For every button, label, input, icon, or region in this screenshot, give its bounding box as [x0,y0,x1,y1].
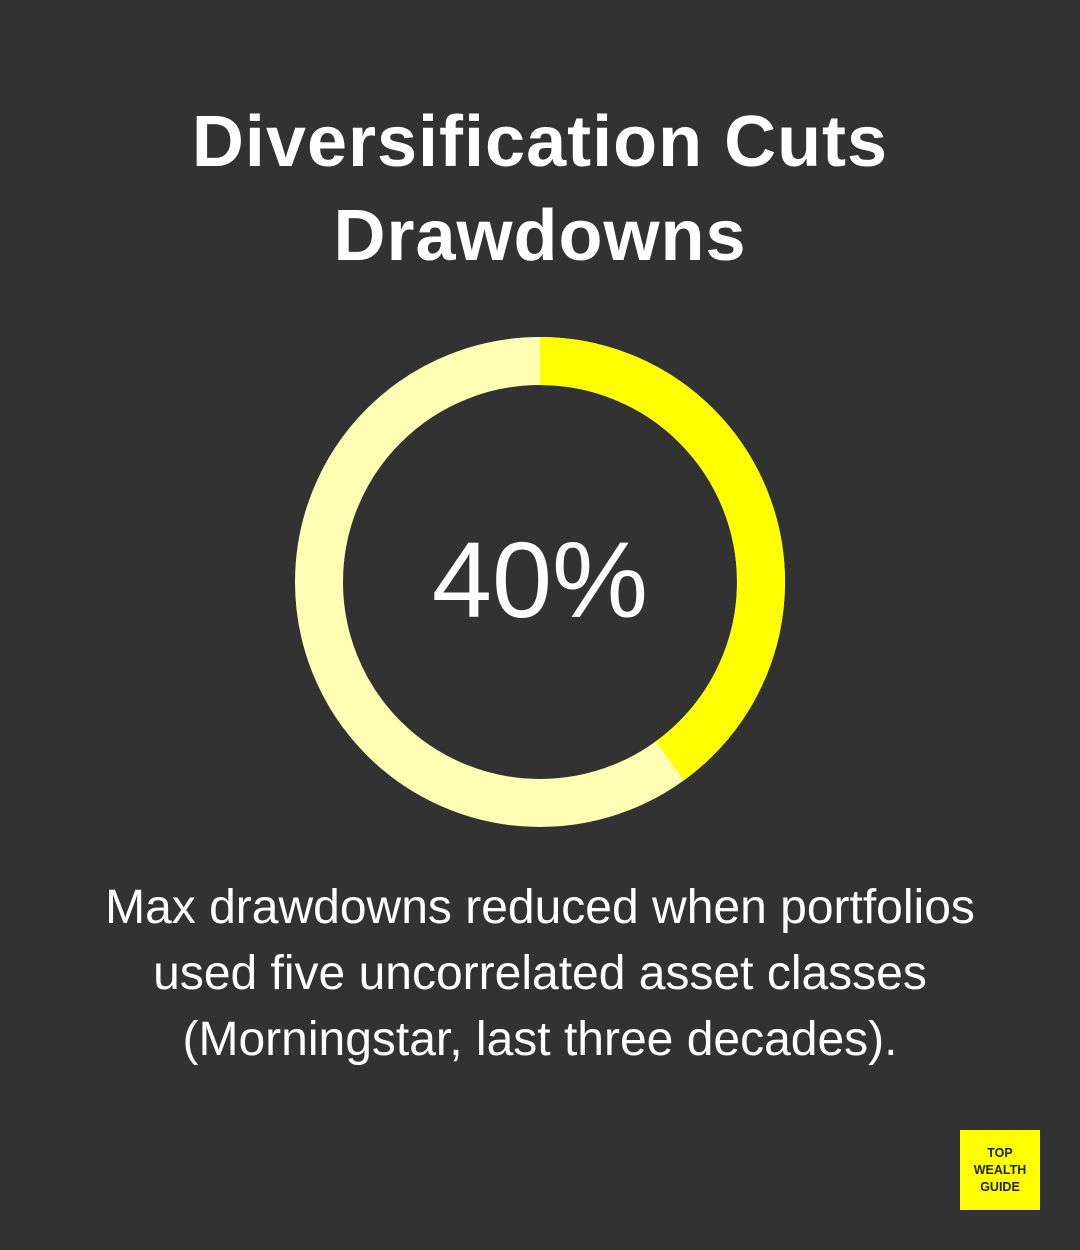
description: (Morningstar, last three decades). [182,1013,898,1066]
logo: WEALTH [974,1162,1026,1176]
description [105,881,975,1066]
donut chart [295,337,785,827]
description: Max drawdowns reduced when portfolios [105,881,975,934]
logo [960,1130,1040,1210]
title: Drawdowns [333,196,747,276]
title: Diversification Cuts [192,102,888,182]
title [192,102,888,276]
donut chart: 40% [432,519,648,640]
description: used five uncorrelated asset classes [153,947,927,1000]
logo: GUIDE [980,1180,1020,1194]
logo: TOP [987,1146,1013,1160]
